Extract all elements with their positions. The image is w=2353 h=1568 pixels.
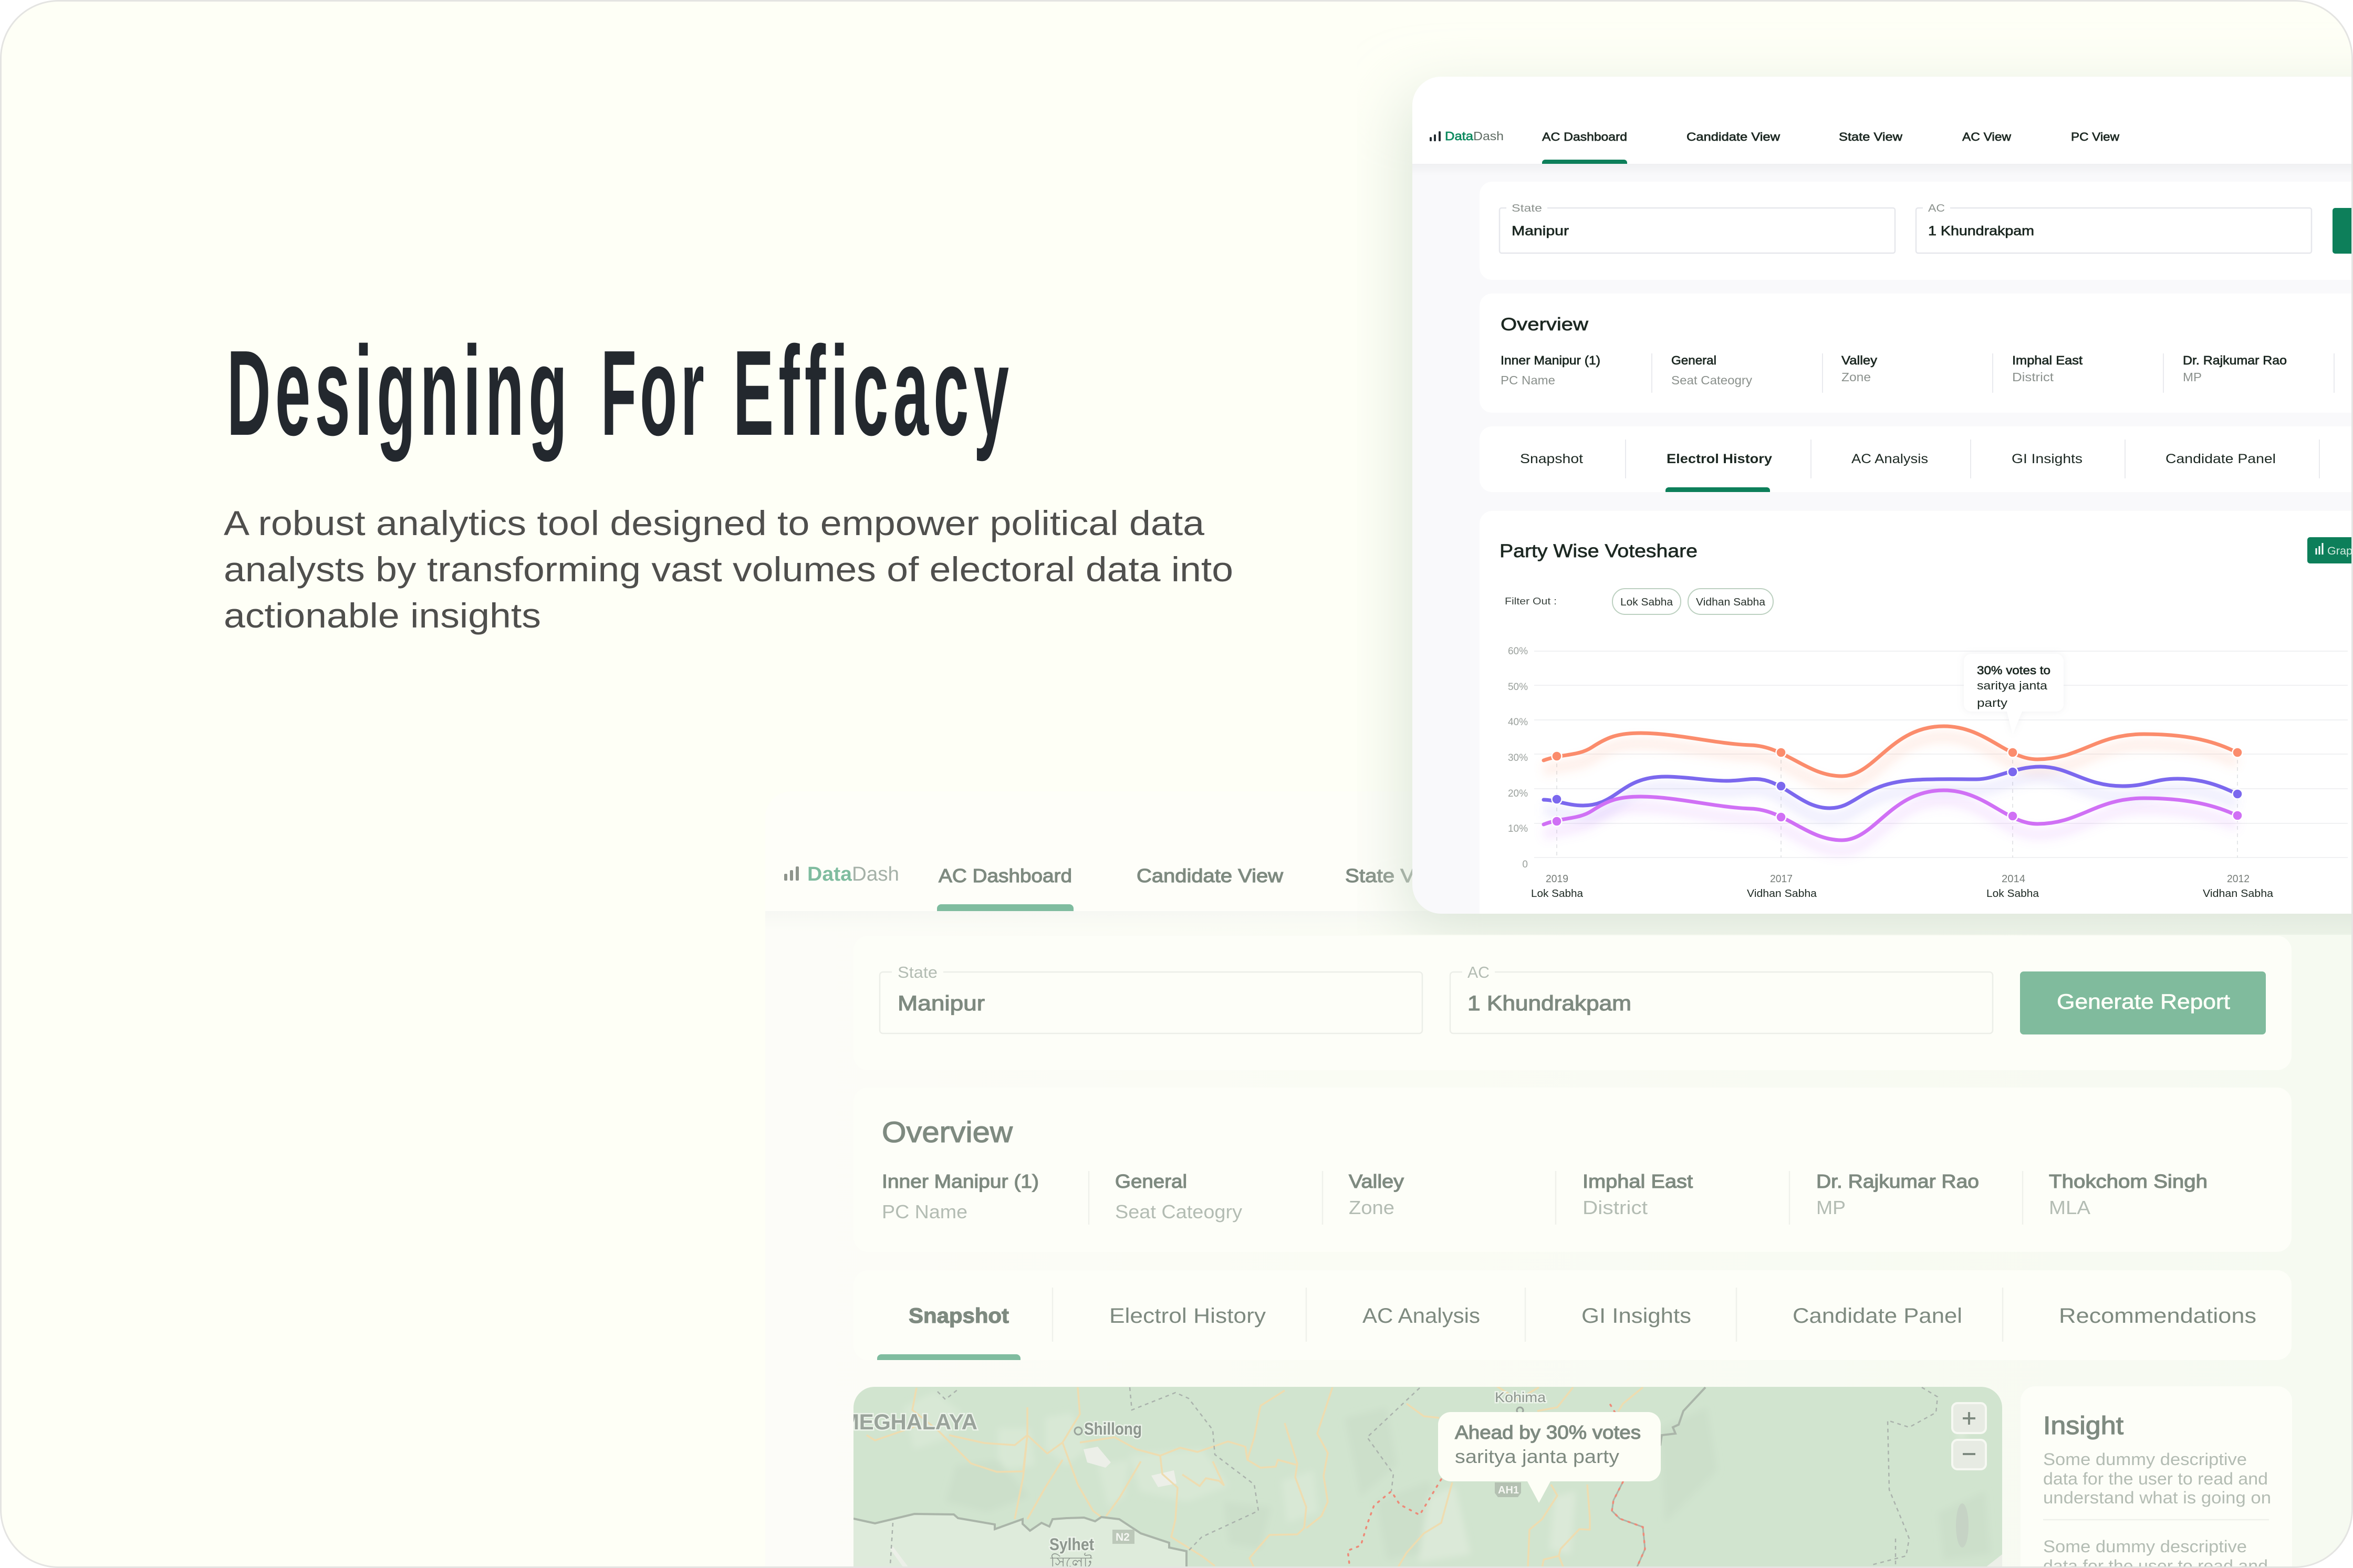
panel: faded overview: MLA — [2049, 1197, 2090, 1218]
chart axes: Lok Sabha — [1986, 888, 2039, 900]
logo: Dash — [1473, 129, 1504, 143]
filter chips: Filter Out : — [1505, 596, 1557, 607]
navigation: AC Dashboard — [1542, 130, 1627, 143]
panel: faded tabs: Recommendations — [2059, 1304, 2256, 1327]
chart axes: 2017 — [1770, 873, 1793, 885]
panel: faded report filters — [879, 966, 2266, 1034]
panel: overview: Zone — [1841, 370, 1871, 384]
panel: tabs: AC Analysis — [1851, 452, 1928, 466]
chart tooltip: 30% votes to — [1977, 664, 2050, 677]
orange series line — [1544, 726, 2237, 787]
map borders — [853, 1387, 1938, 1568]
panel: overview: MP — [2183, 370, 2202, 384]
filter chips — [1505, 589, 1773, 614]
panel: overview: Imphal East — [2012, 353, 2083, 367]
chart axes: Vidhan Sabha — [1747, 888, 1817, 900]
navigation: Candidate View — [1686, 130, 1780, 143]
filter chips: Lok Sabha — [1620, 597, 1673, 608]
panel: overview: District — [2012, 370, 2054, 384]
faded logo: Dash — [852, 863, 899, 885]
panel: faded overview: Overview — [882, 1115, 1013, 1148]
chart axes: 30% — [1508, 752, 1528, 764]
panel: overview: Dr. Rajkumar Rao — [2183, 353, 2287, 367]
panel: report filters: Manipur — [1512, 224, 1569, 238]
panel: faded report filters: 1 Khundrakpam — [1467, 992, 1631, 1015]
map tooltip: Ahead by 30% votes — [1455, 1421, 1641, 1443]
panel: faded overview — [853, 1088, 2292, 1252]
panel: tabs: Snapshot — [1520, 452, 1583, 466]
panel: faded report filters: AC — [1467, 963, 1490, 981]
panel: faded insight: data for the user to read and — [2043, 1469, 2268, 1488]
map labels: Kohima — [1495, 1389, 1546, 1405]
panel: tabs: GI Insights — [2012, 452, 2083, 466]
panel: overview: Overview — [1501, 315, 1589, 334]
title — [231, 342, 1008, 462]
panel: report filters — [1480, 182, 2353, 280]
map tooltip — [1438, 1412, 1661, 1503]
panel: faded overview: Inner Manipur (1) — [882, 1170, 1039, 1192]
map panel — [841, 1386, 2002, 1568]
panel: faded insight: Insight — [2043, 1412, 2123, 1440]
panel: report filters: State — [1512, 203, 1542, 214]
panel: faded overview: Dr. Rajkumar Rao — [1816, 1170, 1979, 1192]
navigation — [1542, 130, 2119, 164]
panel: faded overview: Imphal East — [1582, 1170, 1693, 1192]
generate report button — [2020, 971, 2266, 1034]
map terrain shading — [903, 1392, 1991, 1562]
AH1 road badge — [1495, 1482, 1521, 1497]
panel: party wise voteshare chart — [1480, 511, 2353, 931]
panel: faded report filters: Manipur — [898, 992, 985, 1015]
panel: report filters: 1 Khundrakpam — [1928, 224, 2034, 238]
card shadow — [1408, 100, 2353, 927]
faded navigation: State View — [1345, 865, 1446, 886]
panel: overview — [1480, 294, 2353, 413]
panel: party wise voteshare chart: Party Wise Voteshare — [1500, 541, 1698, 561]
panel: tabs: Electrol History — [1667, 452, 1772, 466]
panel: faded tabs: Electrol History — [1109, 1304, 1266, 1327]
panel: overview: Seat Cateogry — [1671, 373, 1753, 387]
panel: faded report filters: State — [898, 963, 938, 981]
chart axes: 2019 — [1546, 873, 1568, 885]
filter chips: Vidhan Sabha — [1696, 597, 1766, 608]
panel: tabs — [1480, 426, 2353, 492]
panel: faded insight: Some dummy descriptive — [2043, 1450, 2247, 1469]
panel: faded overview: District — [1582, 1197, 1648, 1218]
title: Designing — [227, 320, 567, 462]
chart axes: 50% — [1508, 682, 1528, 693]
logo — [1430, 129, 1504, 143]
map roads — [867, 1386, 1643, 1568]
chart axes: 0 — [1522, 859, 1528, 870]
panel: faded tabs: Snapshot — [909, 1304, 1009, 1327]
map labels: Shillong — [1084, 1419, 1142, 1438]
panel: overview: PC Name — [1501, 373, 1555, 387]
chart tooltip: saritya janta — [1977, 679, 2048, 692]
chart axes: 2014 — [2002, 873, 2025, 885]
map zoom controls — [1952, 1403, 1986, 1469]
panel: faded background dashboard — [784, 866, 2270, 1566]
chart axes: 60% — [1508, 646, 1528, 657]
panel: faded insight: Some dummy descriptive — [2043, 1537, 2247, 1556]
chart axes: 20% — [1508, 788, 1528, 799]
panel: overview: Inner Manipur (1) — [1501, 353, 1600, 367]
subtitle text block: analysts by transforming vast volumes of electoral data into — [224, 550, 1233, 589]
subtitle text block: actionable insights — [224, 596, 541, 635]
faded logo — [784, 866, 898, 881]
navigation: AC View — [1962, 130, 2011, 143]
chart tooltip: party — [1977, 696, 2007, 709]
panel: overview: General — [1671, 353, 1716, 367]
N2 road badge: N2 — [1116, 1531, 1130, 1543]
subtitle text block: A robust analytics tool designed to empower political data — [224, 504, 1204, 542]
panel: faded overview: Seat Cateogry — [1115, 1201, 1242, 1222]
generate button (cropped) — [2333, 208, 2353, 254]
panel: foreground dashboard card — [1412, 77, 2353, 931]
panel: tabs: Candidate Panel — [2165, 452, 2276, 466]
panel: faded overview: MP — [1816, 1197, 1846, 1218]
generate report button: Generate Report — [2057, 990, 2230, 1013]
navigation: State View — [1839, 130, 1902, 143]
chart tooltip — [1964, 654, 2064, 735]
pink series line — [1544, 790, 2237, 851]
panel: faded insight: understand what is going on — [2043, 1488, 2271, 1507]
subtitle text block — [224, 504, 1233, 635]
faded navigation: Candidate View — [1137, 865, 1284, 886]
graph toggle button — [2307, 537, 2353, 563]
panel: faded insight — [2021, 1386, 2292, 1568]
panel: faded overview: Zone — [1349, 1197, 1394, 1218]
panel: faded overview: PC Name — [882, 1201, 967, 1222]
panel: faded overview: Valley — [1349, 1170, 1404, 1192]
map tooltip: saritya janta party — [1455, 1446, 1619, 1467]
chart axes: 40% — [1508, 717, 1528, 728]
logo: Data — [1445, 129, 1473, 143]
panel: faded overview: Thokchom Singh — [2049, 1170, 2208, 1192]
panel: faded tabs: AC Analysis — [1362, 1304, 1480, 1327]
faded navigation: AC Dashboard — [939, 865, 1072, 886]
map labels — [841, 1389, 1546, 1568]
chart axes: Vidhan Sabha — [2203, 888, 2274, 900]
data point markers — [1552, 748, 2243, 827]
N2 road badge — [1112, 1530, 1134, 1544]
panel: faded tabs: Candidate Panel — [1793, 1304, 1962, 1327]
purple series line — [1544, 767, 2237, 819]
map labels: MEGHALAYA — [841, 1409, 977, 1434]
faded navigation — [937, 868, 1412, 911]
panel: report filters: AC — [1928, 203, 1945, 214]
chart axes: Lok Sabha — [1531, 888, 1584, 900]
chart axes: 10% — [1508, 823, 1528, 834]
navigation: PC View — [2071, 130, 2119, 143]
map labels: Sylhet — [1049, 1535, 1094, 1554]
title: Efficacy — [733, 320, 1009, 462]
faded logo: Data — [807, 863, 852, 885]
panel: overview: Valley — [1841, 353, 1878, 367]
AH1 road badge: AH1 — [1498, 1485, 1519, 1496]
title: For — [601, 320, 704, 462]
chart axes — [1508, 646, 2348, 900]
panel: faded overview: General — [1115, 1170, 1187, 1192]
panel: faded tabs — [853, 1270, 2292, 1360]
chart axes: 2012 — [2227, 873, 2250, 885]
panel: faded tabs: GI Insights — [1581, 1304, 1691, 1327]
